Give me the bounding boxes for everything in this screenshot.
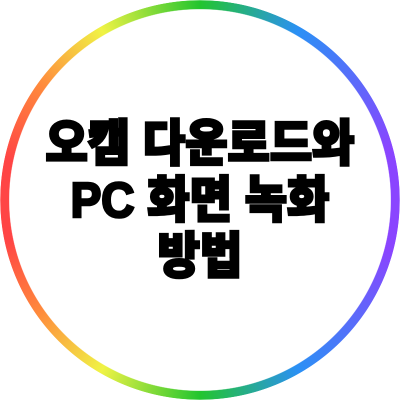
title: 오캠 다운로드와	[45, 115, 355, 171]
title	[45, 115, 355, 283]
title: PC 화면 녹화	[71, 172, 329, 227]
title: 방법	[158, 228, 242, 283]
